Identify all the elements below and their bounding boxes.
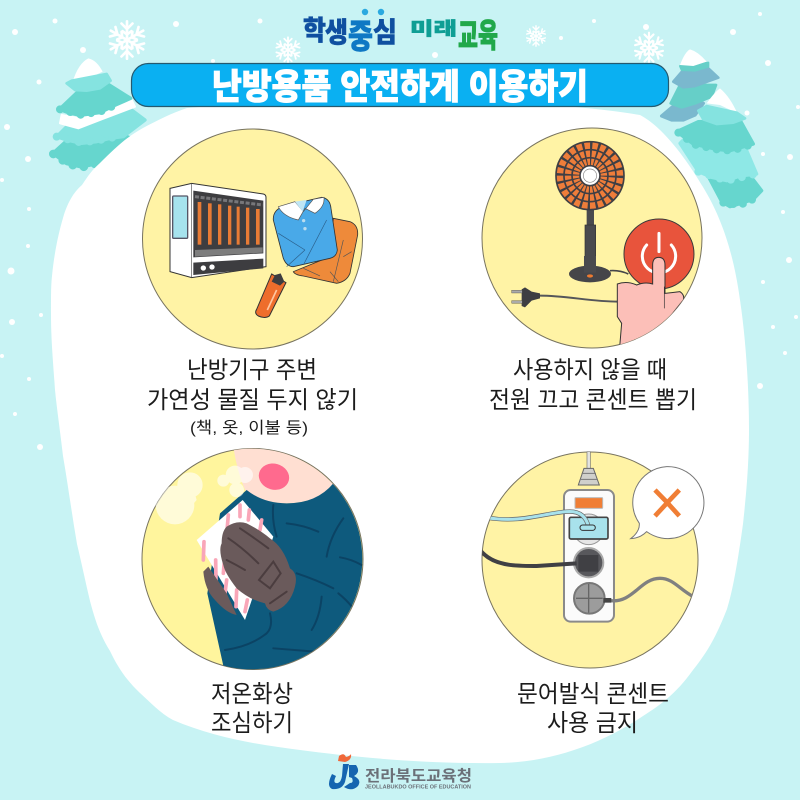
logo: 학생중심 미래교육: 심 <box>373 17 397 48</box>
panel: power strip <box>480 452 704 668</box>
illustration: overloaded power strip <box>480 452 704 622</box>
circle: yellow background <box>142 129 362 349</box>
circle: yellow background <box>142 448 363 670</box>
logo: Jeollabukdo office of education <box>329 754 472 790</box>
panel: low temperature burn <box>142 447 370 673</box>
illustration: heater, clothes, lighter <box>170 183 358 317</box>
text: power strip label: 문어발식 콘센트 <box>517 681 669 708</box>
logo: 학생중심 미래교육: 생 <box>325 17 348 48</box>
logo: 학생중심 미래교육: 학 <box>303 16 326 46</box>
text: unplug label: 사용하지 않을 때 <box>513 357 667 384</box>
text: burn label: 저온화상 <box>211 681 293 708</box>
text: burn label: 조심하기 <box>211 710 293 737</box>
illustration: hand warmer on skin <box>156 447 370 673</box>
logo: Jeollabukdo office of education: 전라북도교육청 <box>365 767 472 785</box>
logo: 학생중심 미래교육: 교육 <box>458 18 498 54</box>
title banner <box>132 64 668 107</box>
title banner: 난방용품 안전하게 이용하기 <box>212 68 588 107</box>
text: unplug label: 전원 끄고 콘센트 뽑기 <box>489 387 697 414</box>
text: heater label: 가연성 물질 두지 않기 <box>147 387 358 414</box>
icon: right snowy trees <box>662 49 762 207</box>
icon: left snowy tree <box>53 58 145 167</box>
logo: Jeollabukdo office of education: JEOLLABUKDO OFFICE OF EDUCATION <box>365 784 471 790</box>
snow dots <box>0 12 800 450</box>
panel: unplug <box>482 128 702 363</box>
text: burn label <box>211 681 293 737</box>
logo: 학생중심 미래교육 <box>303 9 498 56</box>
panel: white blob background <box>51 100 749 763</box>
text: heater label: 난방기구 주변 <box>187 357 317 384</box>
circle: yellow background <box>482 128 702 348</box>
panel: heater safety <box>142 129 362 349</box>
icon: snowflakes <box>108 21 665 63</box>
text: heater label: (책, 옷, 이불 등) <box>190 419 308 437</box>
text: power strip label: 사용 금지 <box>547 710 638 737</box>
illustration: electric fan heater, power button, hand <box>512 142 694 363</box>
text: heater label <box>147 357 358 437</box>
circle: yellow background <box>482 452 698 668</box>
text: unplug label <box>489 357 697 414</box>
text: power strip label <box>517 681 669 737</box>
logo: 학생중심 미래교육: 중 <box>348 18 373 56</box>
logo: 학생중심 미래교육: 미래 <box>410 19 457 39</box>
